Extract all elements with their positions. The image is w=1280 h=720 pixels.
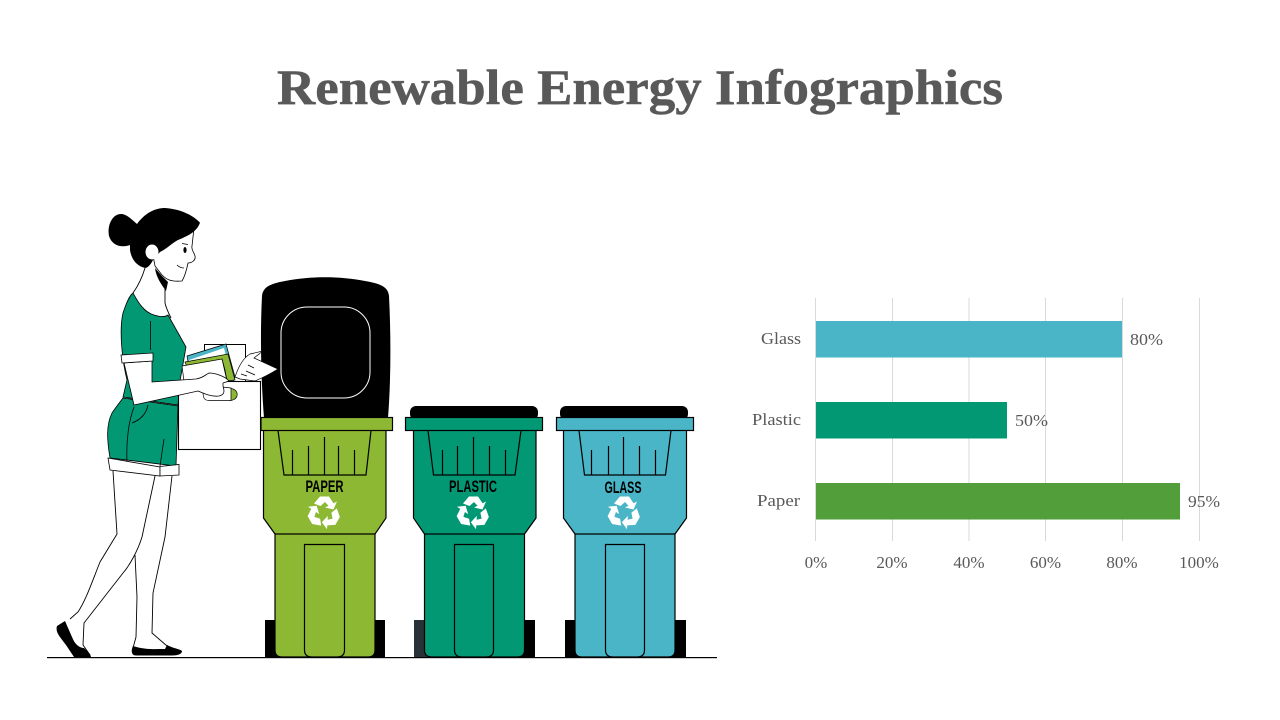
category labels: Plastic xyxy=(752,410,801,429)
bar: glass: 80% xyxy=(1130,330,1163,349)
paper sheet xyxy=(235,351,278,381)
icon: recycle xyxy=(453,496,492,532)
category labels: Glass xyxy=(761,329,801,348)
head with hair xyxy=(109,208,200,291)
shoes xyxy=(57,621,182,657)
bin: paper: PAPER xyxy=(306,477,344,496)
bar: glass xyxy=(816,321,1163,358)
ground line xyxy=(47,657,717,658)
axis labels: 100% xyxy=(1179,553,1219,572)
cardboard box front xyxy=(178,382,260,450)
category labels: Paper xyxy=(757,491,800,510)
neck xyxy=(133,266,170,318)
neck outline xyxy=(133,268,171,318)
axis labels: 60% xyxy=(1030,553,1061,572)
shorts cuffs xyxy=(108,458,179,476)
bar: paper xyxy=(816,483,1220,520)
axis labels: 80% xyxy=(1106,553,1138,572)
back hand and green object xyxy=(203,386,237,400)
bin: paper xyxy=(261,418,392,657)
illustration: woman recycling at three bins xyxy=(47,208,717,658)
axis labels xyxy=(805,553,1219,572)
bar: paper: 95% xyxy=(1188,492,1220,511)
legs xyxy=(70,471,172,657)
category labels xyxy=(752,329,801,510)
green shorts xyxy=(108,398,178,466)
axis labels: 20% xyxy=(876,553,908,572)
box back flap xyxy=(204,344,246,384)
clothing seams xyxy=(127,321,164,466)
sleeve cuff xyxy=(121,353,153,363)
bar: plastic: 50% xyxy=(1015,411,1048,430)
axis labels: 0% xyxy=(805,553,827,572)
bin: glass xyxy=(556,406,694,657)
books in box xyxy=(182,344,235,384)
arm and hand xyxy=(124,361,229,405)
bin: glass: GLASS xyxy=(604,478,642,497)
icon: recycle xyxy=(604,496,643,532)
title: Renewable Energy Infographics xyxy=(277,59,1003,115)
bin: plastic: PLASTIC xyxy=(449,477,497,496)
large open lid of paper bin xyxy=(261,277,390,418)
woman figure xyxy=(57,208,278,657)
bin: plastic xyxy=(406,406,542,657)
green dress xyxy=(121,293,186,405)
bar: plastic xyxy=(816,402,1048,438)
icon: recycle xyxy=(304,496,343,532)
grid lines xyxy=(816,298,1200,541)
horizontal bar chart xyxy=(752,298,1220,572)
axis labels: 40% xyxy=(953,553,985,572)
